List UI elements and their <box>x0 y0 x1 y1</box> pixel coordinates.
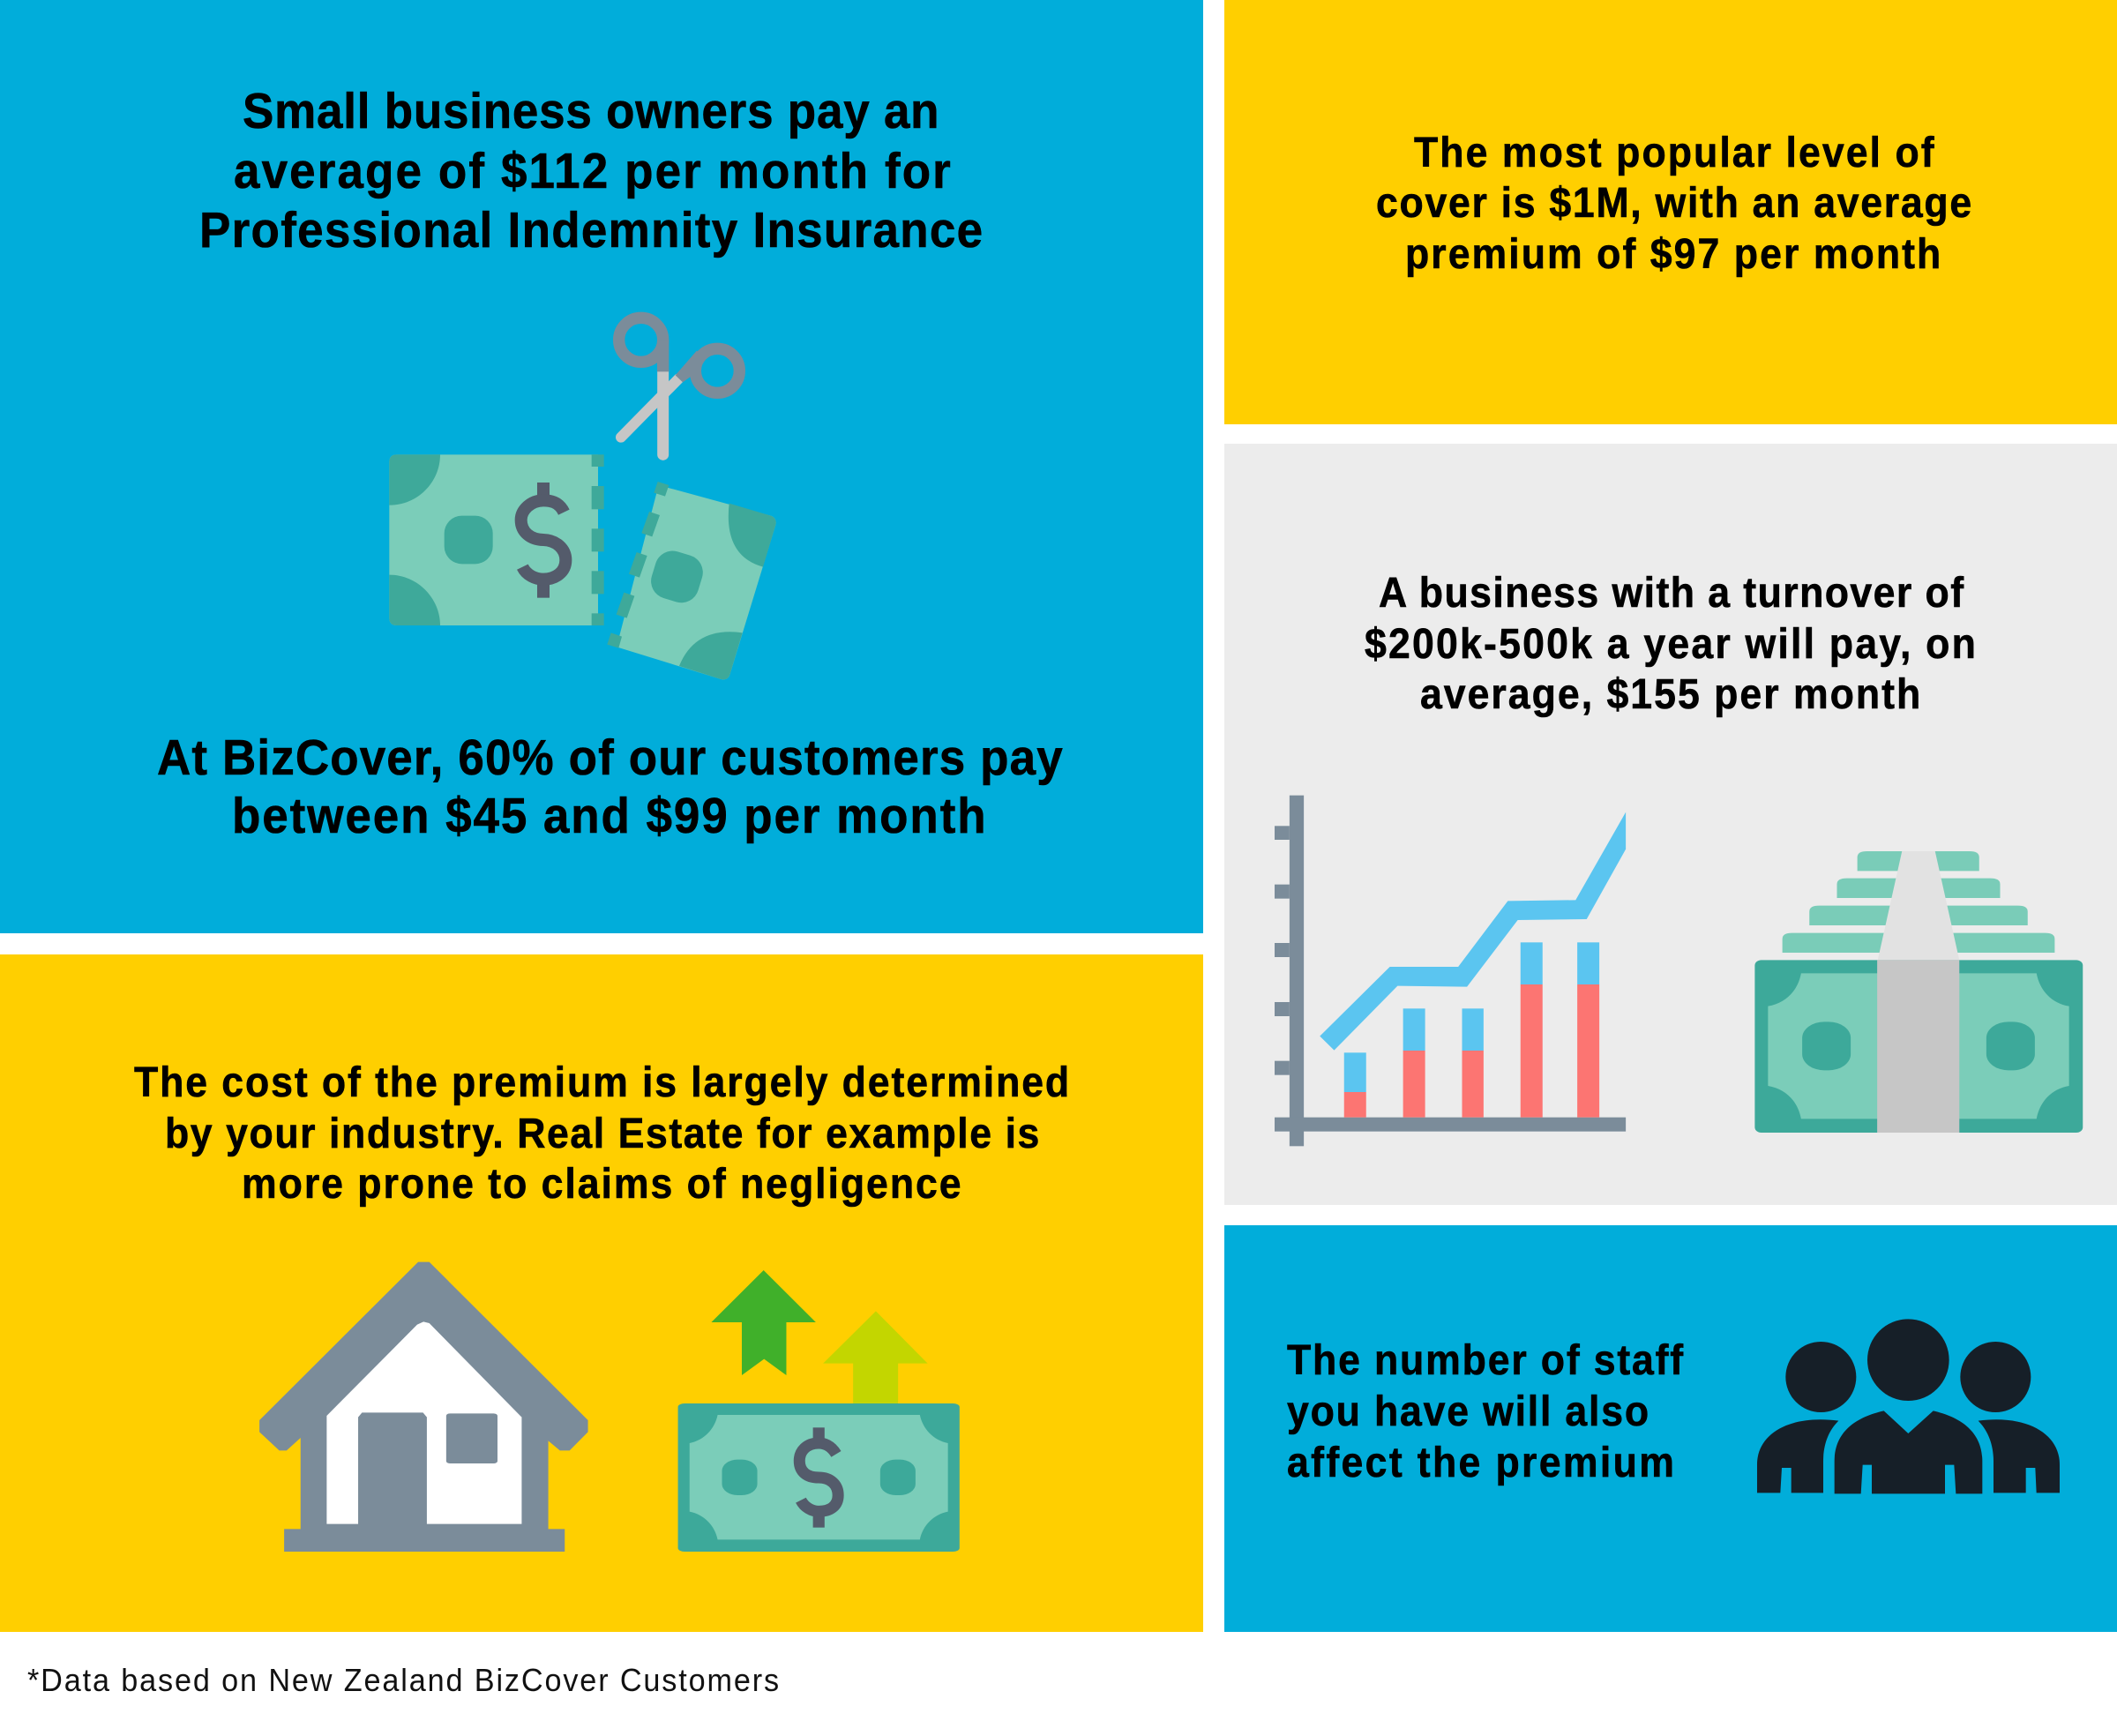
text: popular cover level: The most popular level of <box>1414 129 1934 176</box>
text: industry effect: more prone to claims of negligence <box>242 1160 961 1207</box>
text: staff numbers: you have will also <box>1287 1388 1649 1434</box>
panel: popular cover level <box>1224 0 2117 424</box>
heading: average premium: Professional Indemnity Insurance <box>199 201 983 258</box>
heading: average premium: average of $112 per month for <box>234 142 951 198</box>
footnote: *Data based on New Zealand BizCover Customers <box>27 1663 779 1698</box>
text: BizCover customers: At BizCover, 60% of our customers pay <box>157 729 1063 785</box>
heading: average premium <box>199 82 983 258</box>
text: BizCover customers <box>157 729 1063 843</box>
text: staff numbers <box>1287 1336 1684 1485</box>
chart icon: rising line and bars <box>1275 796 1626 1146</box>
panel: average premium <box>0 0 1203 933</box>
text: popular cover level <box>1376 129 1971 277</box>
text: turnover <box>1365 569 1976 717</box>
text: turnover: average, $155 per month <box>1420 670 1920 717</box>
text: industry effect: The cost of the premium is largely determined <box>134 1059 1069 1105</box>
icon: arrows rising over banknote <box>678 1270 960 1552</box>
icon: scissors cutting a banknote <box>389 318 776 679</box>
text: popular cover level: premium of $97 per month <box>1405 230 1941 277</box>
text: BizCover customers: between $45 and $99 per month <box>232 787 986 843</box>
text: industry effect <box>134 1059 1069 1207</box>
text: turnover: $200k-500k a year will pay, on <box>1365 620 1976 667</box>
text: staff numbers: affect the premium <box>1287 1439 1674 1485</box>
text: turnover: A business with a turnover of <box>1379 569 1964 616</box>
heading: average premium: Small business owners pay an <box>243 82 939 138</box>
panel: staff numbers <box>1224 1225 2117 1632</box>
icon: house <box>259 1262 588 1552</box>
icon: stack of banknotes <box>1754 851 2083 1133</box>
panel: turnover <box>1224 444 2117 1205</box>
text: popular cover level: cover is $1M, with an average <box>1376 179 1971 226</box>
text: staff numbers: The number of staff <box>1287 1336 1684 1383</box>
text: industry effect: by your industry. Real Estate for example is <box>165 1110 1039 1156</box>
icon: three people <box>1757 1319 2060 1493</box>
panel: industry effect <box>0 954 1203 1632</box>
